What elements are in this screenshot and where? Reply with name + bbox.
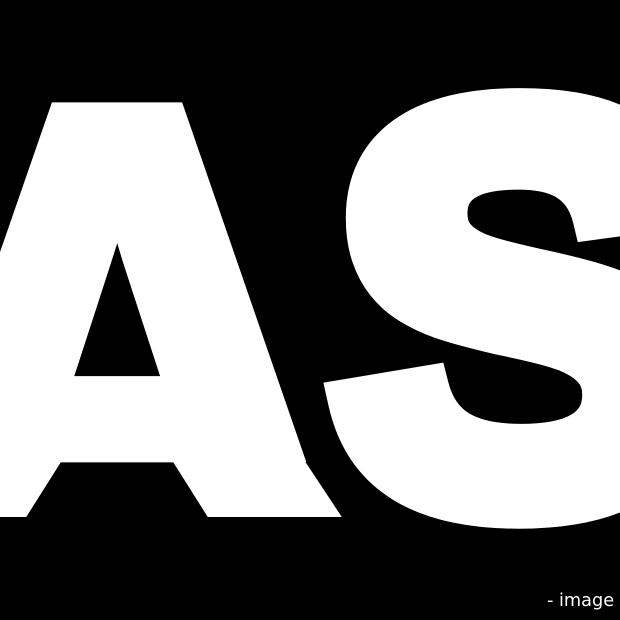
large letter A: [0, 102, 342, 517]
caption: - image: [547, 591, 614, 611]
